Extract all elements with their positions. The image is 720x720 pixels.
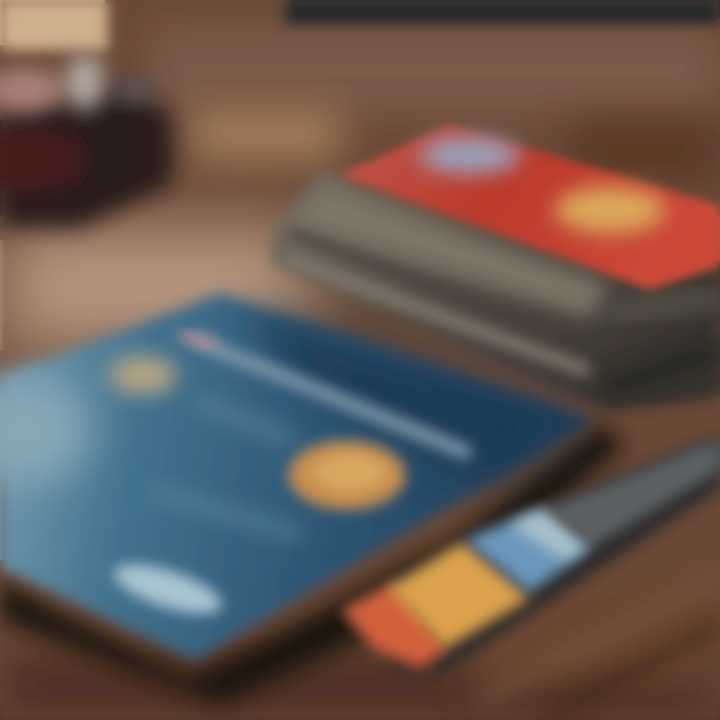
red card	[340, 125, 720, 288]
blue card	[0, 293, 595, 660]
striped card bottom right	[340, 436, 720, 672]
dark background at top right	[285, 0, 720, 24]
blue logo on red card	[420, 137, 520, 173]
grey segment	[545, 438, 720, 548]
gold chip	[289, 441, 405, 509]
faint text rows	[195, 400, 290, 440]
yellow chip on red card	[555, 187, 665, 233]
white label	[109, 555, 227, 623]
orange segment	[342, 582, 448, 668]
card shadow	[0, 425, 625, 705]
yellow segment	[388, 542, 530, 648]
light text stripe	[200, 342, 465, 452]
stack of cards	[272, 172, 720, 412]
small chip	[109, 356, 177, 394]
dark object top left	[0, 54, 172, 228]
blue segment	[465, 512, 590, 592]
light area top left	[0, 0, 108, 50]
